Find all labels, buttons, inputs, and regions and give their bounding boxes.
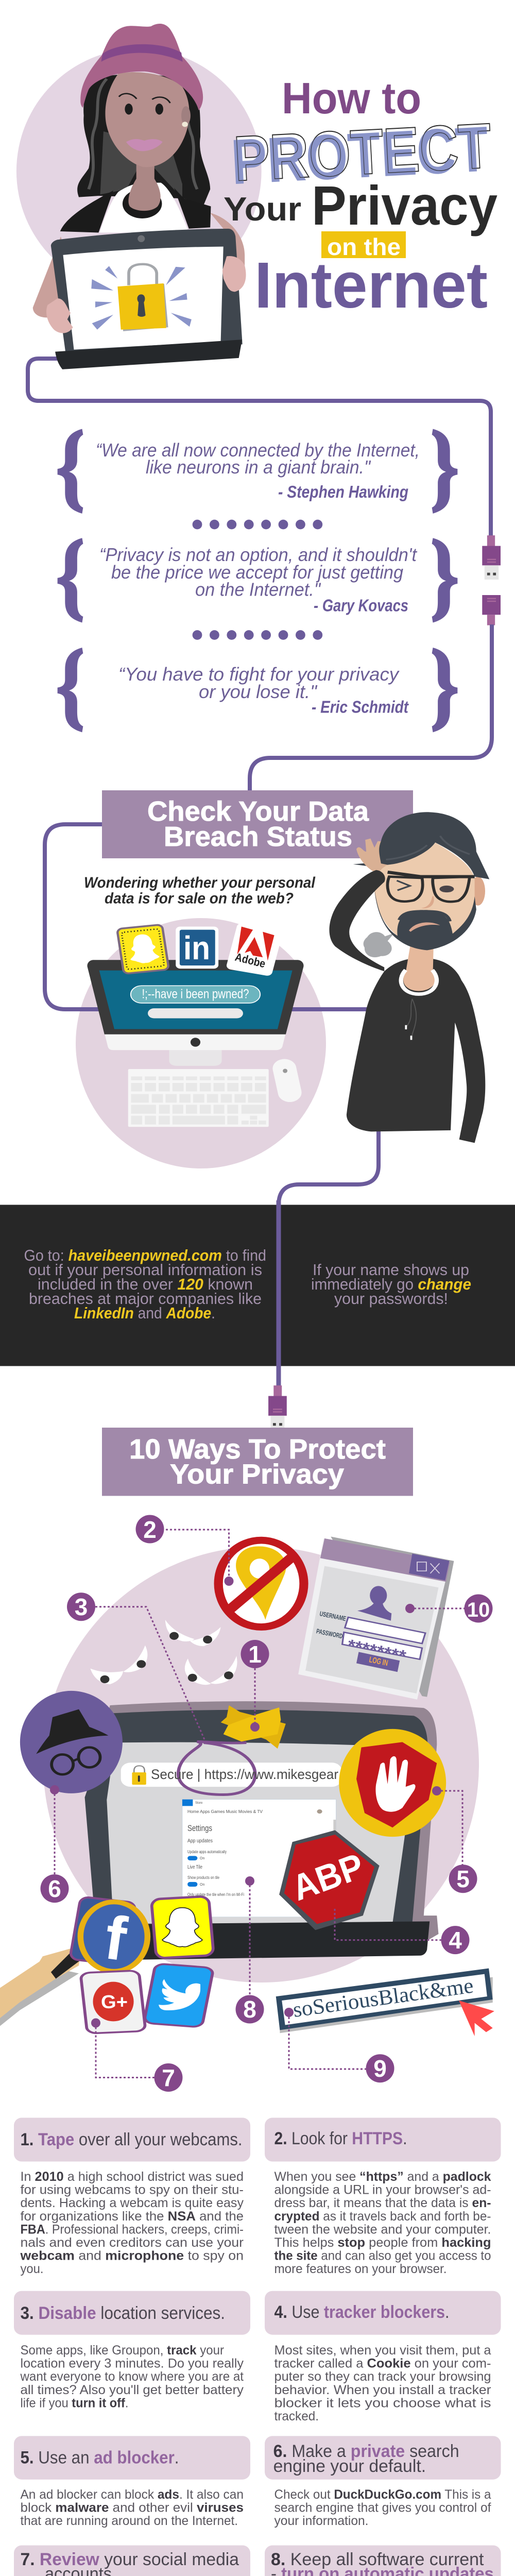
- quote: Gary Kovacs: “Privacy is not an option, and it shouldn't: [99, 544, 418, 565]
- tip 1: webcam and microphone to spy on: [20, 2249, 244, 2263]
- brace left: [58, 538, 83, 623]
- background oval: computer: [76, 918, 326, 1168]
- icon: ad block hand shield: [339, 1729, 446, 1837]
- numbered callouts with dotted leaders: [40, 1515, 492, 2092]
- monitor chin: [105, 1033, 286, 1050]
- dot divider: [193, 520, 322, 529]
- login window: [298, 1536, 454, 1700]
- tape over webcam: [221, 1705, 286, 1749]
- brace left: [58, 429, 83, 514]
- tip 2: 2. Look for HTTPS.: [274, 2129, 407, 2148]
- hands: [46, 298, 73, 333]
- numbered callouts with dotted leaders: 4: [449, 1927, 462, 1954]
- numbered callouts with dotted leaders: 2: [143, 1516, 157, 1543]
- tip 8: [265, 2545, 501, 2576]
- numbered callouts with dotted leaders: 1: [248, 1641, 262, 1668]
- quote: Stephen Hawking: - Stephen Hawking: [278, 482, 408, 501]
- settings window text: Live Tile: [187, 1865, 202, 1870]
- hand drawn circle around https: [178, 1741, 255, 1794]
- quote: Gary Kovacs: [58, 538, 457, 623]
- cable: loop behind monitor and man: [45, 824, 368, 1009]
- question text: Wondering whether your personal: [84, 874, 316, 891]
- usb plugs on the cable: [482, 535, 501, 625]
- laptop: [85, 1701, 438, 1960]
- tip 4: Most sites, when you visit them, put a: [274, 2343, 491, 2358]
- tip 5: 5. Use an ad blocker.: [21, 2448, 179, 2468]
- tip 1: In 2010 a high school district was sued: [21, 2170, 244, 2184]
- brace left: [58, 648, 83, 732]
- illustration: ten ways laptop scene: [0, 1536, 494, 2036]
- face: [374, 842, 475, 949]
- tip 2: When you see “https” and a padlock: [274, 2170, 491, 2184]
- tip 2: the site and can also get you access to: [274, 2249, 491, 2263]
- icon: twitter tile: [144, 1963, 214, 2027]
- tip 1: for organizations like the NSA and the: [21, 2209, 244, 2224]
- settings window text: Show products on tile: [187, 1875, 219, 1880]
- beard: [374, 888, 476, 950]
- tip 3: Some apps, like Groupon, track your: [21, 2343, 224, 2358]
- linkedin label: in: [183, 929, 210, 967]
- tip 8: 8. Keep all software current: [271, 2550, 484, 2569]
- brace right: [432, 429, 457, 514]
- smoke puff: [364, 932, 394, 957]
- numbered callouts with dotted leaders: 10: [467, 1599, 490, 1621]
- hair: [77, 74, 210, 205]
- cable: man to dark band and second USB plug: [279, 1128, 379, 1386]
- tip 1: nals and even creditors can use your: [21, 2235, 244, 2250]
- hair flick: [353, 862, 377, 868]
- icon: snapchat tile: [151, 1896, 214, 1958]
- settings window text: Home Apps Games Music Movies & TV: [187, 1809, 263, 1814]
- address bar url text: Secure | https://www.mikesgear: [151, 1767, 338, 1782]
- settings window text: Store: [195, 1802, 203, 1805]
- search label: !;--have i been pwned?: [142, 987, 249, 1002]
- title: on the: [327, 233, 401, 260]
- heading: 10 Ways To Protect Your Privacy: 10 Ways To Protect: [129, 1434, 386, 1465]
- tip 3: location every 3 minutes. Do you really: [21, 2357, 244, 2371]
- login labels: USERNAME: [319, 1609, 347, 1622]
- tip 1: you.: [21, 2262, 43, 2276]
- neck and collar: [403, 944, 435, 991]
- hoodie body: [347, 958, 485, 1143]
- heading: 10 Ways To Protect Your Privacy: [102, 1428, 413, 1496]
- padlock: [129, 264, 157, 285]
- google plus text: G+: [101, 1991, 128, 2012]
- tip 2: alongside a URL in your browser's ad-: [274, 2183, 491, 2197]
- advice: haveibeenpwned: included in the over 120 known: [38, 1275, 253, 1293]
- icon: linkedin tile: [176, 926, 218, 969]
- icon: no location sign: [218, 1540, 304, 1627]
- quote: Gary Kovacs: - Gary Kovacs: [314, 596, 408, 615]
- illustration: frustrated man: [329, 812, 489, 1143]
- tip 1: for using webcams to spy on their stu-: [21, 2183, 244, 2197]
- watching eyes: [90, 1620, 237, 1685]
- tip 7: [14, 2545, 250, 2576]
- tip 7: 7. Review your social media: [21, 2550, 239, 2569]
- hair: [379, 812, 489, 879]
- tip 4: behavior. When you install a tracker: [274, 2383, 491, 2397]
- illustration: computer with breached logos: [87, 922, 304, 1127]
- ear: [471, 877, 485, 906]
- adobe label: Adobe: [234, 951, 267, 970]
- hat: [80, 24, 203, 110]
- advice: change passwords: [311, 1261, 471, 1308]
- tip 2: crypted as it travels back and forth be-: [274, 2209, 491, 2224]
- login labels: ********: [346, 1636, 408, 1666]
- heading: 10 Ways To Protect Your Privacy: Your Privacy: [170, 1459, 344, 1490]
- neck: [128, 163, 161, 211]
- quote: Eric Schmidt: or you lose it.": [199, 681, 318, 702]
- login labels: [316, 1609, 408, 1668]
- cable: second plug down to the breach status heading: [250, 624, 492, 791]
- tip 5: that are running around on the Internet.: [21, 2514, 238, 2528]
- tip 2: more features on your browser.: [274, 2262, 447, 2276]
- hand and magnifier: [0, 1947, 82, 2026]
- tip 4: 4. Use tracker blockers.: [274, 2302, 449, 2322]
- advice: change passwords: your passwords!: [334, 1290, 448, 1308]
- nose: [421, 896, 434, 908]
- jacket: [60, 188, 211, 233]
- tip 6: Check out DuckDuckGo.com This is a: [274, 2487, 491, 2502]
- tip 4: tracker called a Cookie on your com-: [274, 2357, 491, 2371]
- quote: Gary Kovacs: be the price we accept for just getting: [111, 562, 403, 583]
- title: [224, 74, 497, 321]
- tip 2: This helps stop people from hacking: [274, 2235, 491, 2250]
- tip 6: 6. Make a private search: [273, 2442, 459, 2461]
- settings window text: On: [200, 1883, 204, 1887]
- quote: Eric Schmidt: - Eric Schmidt: [312, 698, 409, 716]
- tip 1: [14, 2117, 250, 2276]
- question text: data is for sale on the web?: [105, 890, 294, 907]
- login labels: PASSWORD: [316, 1627, 344, 1640]
- adblock plus text: ABP: [286, 1845, 369, 1908]
- title line: How to: How to: [282, 74, 421, 123]
- title line: Internet: Internet: [254, 249, 488, 321]
- tip 3: life if you turn it off.: [21, 2396, 129, 2410]
- tip 3: [14, 2291, 250, 2410]
- username tag: [276, 1969, 494, 2036]
- icon: adblock plus stop sign: [279, 1830, 380, 1930]
- mouse: [271, 1058, 303, 1104]
- numbered callouts with dotted leaders: 5: [456, 1866, 470, 1892]
- tip 5: [14, 2436, 250, 2528]
- tip 4: tracked.: [274, 2409, 319, 2424]
- settings window text: App updates: [187, 1838, 213, 1844]
- tip 5: block malware and other evil viruses: [21, 2501, 244, 2515]
- tip 2: [265, 2117, 501, 2276]
- title line: Your Privacy: Your: [224, 190, 301, 228]
- brace right: [432, 648, 457, 732]
- title line: on the: [321, 231, 406, 258]
- heading: Check Your Data Breach Status: Breach Status: [164, 821, 352, 852]
- tip 2: dress bar, it means that the data is en-: [274, 2196, 491, 2210]
- illustration: woman holding laptop: [16, 24, 262, 369]
- advice: haveibeenpwned: breaches at major companies like: [29, 1290, 262, 1308]
- monitor frame: [87, 960, 304, 1035]
- background circle: [16, 48, 262, 294]
- quote: Eric Schmidt: [58, 648, 457, 732]
- stand: [169, 1049, 222, 1066]
- shirt: [99, 183, 189, 233]
- icon: google plus tile: [80, 1971, 146, 2033]
- icon: snapchat tile: [117, 924, 169, 974]
- icon: address bar padlock: [132, 1766, 146, 1785]
- panel: dark band with pwned advice: [0, 1200, 515, 1386]
- tip 4: blocker it lets you choose what is: [274, 2396, 491, 2410]
- settings window text: Update apps automatically: [187, 1850, 227, 1854]
- tip 1: dents. Hacking a webcam is quite easy: [21, 2196, 244, 2210]
- keyboard: [128, 1069, 269, 1127]
- tip 6: search engine that gives you control of: [274, 2501, 491, 2515]
- quote: Stephen Hawking: like neurons in a giant brain.": [146, 456, 371, 478]
- advice: haveibeenpwned: LinkedIn and Adobe.: [74, 1304, 215, 1322]
- brace right: [432, 538, 457, 623]
- usb plug above 10 ways heading: [268, 1385, 287, 1428]
- numbered callouts with dotted leaders: 3: [75, 1594, 88, 1620]
- glasses: [388, 877, 470, 902]
- tip 6: [265, 2436, 501, 2528]
- hand: [356, 839, 389, 874]
- lock rays: [91, 266, 192, 330]
- advice: change passwords: immediately go change: [311, 1275, 471, 1293]
- icon: adobe tile: [226, 922, 284, 976]
- face: [105, 72, 190, 167]
- icon: incognito spy: [20, 1691, 123, 1793]
- numbered callouts with dotted leaders: 7: [162, 2064, 175, 2091]
- tip 1: 1. Tape over all your webcams.: [21, 2130, 243, 2149]
- icon: facebook tile: [70, 1896, 147, 1971]
- tip 5: An ad blocker can block ads. It also can: [21, 2487, 244, 2502]
- quote: Stephen Hawking: [58, 429, 457, 514]
- hoodie strings: [406, 999, 416, 1038]
- laptop: [51, 229, 243, 353]
- tip 6: engine your default.: [273, 2456, 426, 2476]
- settings window text: Settings: [187, 1823, 212, 1833]
- numbered callouts with dotted leaders: 8: [243, 1996, 256, 2023]
- tip 1: FBA. Professional hackers, creeps, crimi-: [21, 2222, 244, 2236]
- settings window text: On: [200, 1857, 204, 1860]
- login labels: LOG IN: [368, 1655, 389, 1668]
- search pill: [131, 986, 260, 1003]
- settings window text: Only update the tile when I'm on Wi-Fi: [187, 1892, 244, 1897]
- arms: [33, 213, 245, 317]
- raised arm: [329, 870, 385, 971]
- title: Privacy: [312, 174, 497, 236]
- heading: Check Your Data Breach Status: Check Your Data: [147, 796, 369, 827]
- tip 3: 3. Disable location services.: [21, 2303, 225, 2323]
- heading: Check Your Data Breach Status: [102, 790, 413, 858]
- tip 3: want everyone to know where you are at: [20, 2369, 244, 2384]
- tip 3: all times? Also you'll get better battery: [21, 2383, 244, 2397]
- dot divider: [193, 630, 322, 640]
- mouth: [409, 922, 440, 932]
- question text: [84, 874, 316, 907]
- cursor: [459, 2001, 494, 2036]
- tip 6: your information.: [274, 2514, 369, 2528]
- quote: Gary Kovacs: on the Internet.": [195, 579, 321, 600]
- address bar: [121, 1762, 341, 1787]
- username tag text: soSeriousBlack&me: [291, 1974, 475, 2022]
- settings window: [182, 1800, 336, 1917]
- settings window text: [187, 1802, 263, 1897]
- quote: Eric Schmidt: “You have to fight for your privacy: [118, 664, 400, 685]
- quote: Stephen Hawking: “We are all now connected by the Internet,: [96, 439, 420, 461]
- numbered callouts with dotted leaders: 9: [373, 2055, 387, 2082]
- advice: haveibeenpwned: out if your personal information is: [28, 1261, 262, 1279]
- background circle: [43, 1547, 479, 1982]
- tip 4: puter so they can track your browsing: [274, 2369, 491, 2384]
- advice: change passwords: If your name shows up: [313, 1261, 469, 1279]
- advice: haveibeenpwned: Go to: haveibeenpwned.com to find: [24, 1246, 266, 1264]
- winking eye: [397, 880, 410, 890]
- cable crossing the band: [276, 1200, 281, 1386]
- numbered callouts with dotted leaders: 6: [48, 1875, 61, 1902]
- facebook f: f: [100, 1903, 131, 1974]
- tip 2: tween the website and your computer.: [274, 2222, 491, 2236]
- cable: from laptop to first USB plug: [28, 359, 491, 537]
- advice: haveibeenpwned: [24, 1246, 266, 1322]
- tip 4: [265, 2291, 501, 2424]
